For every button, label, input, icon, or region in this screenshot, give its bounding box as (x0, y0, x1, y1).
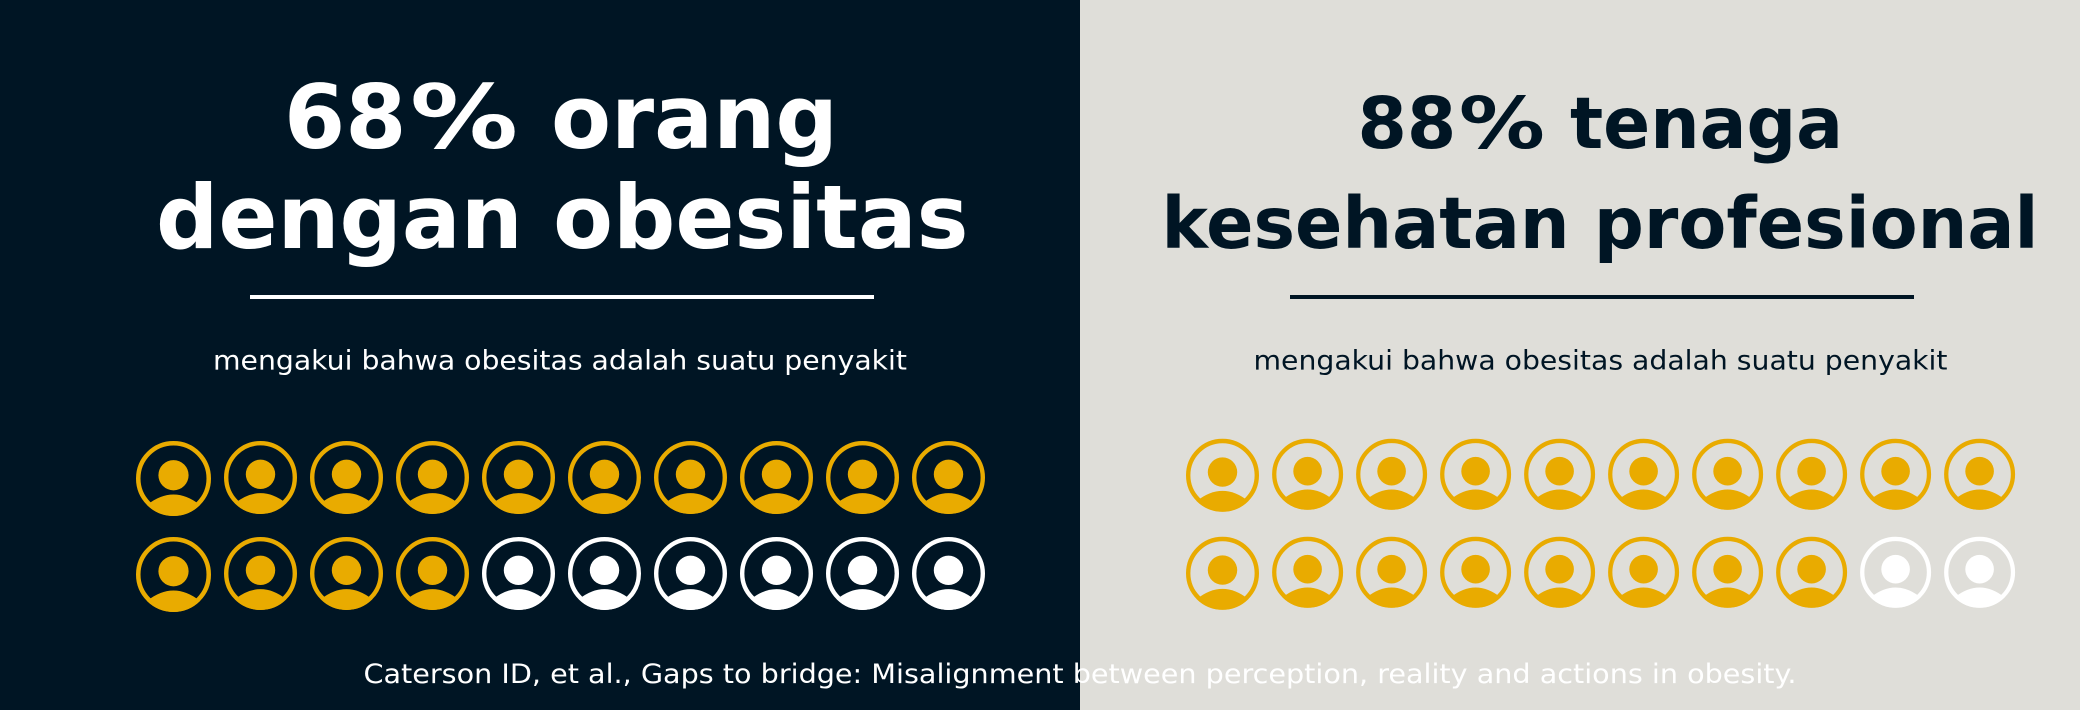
heading: 88% of health professionals: kesehatan profesional (1162, 182, 2038, 265)
left panel background (0, 0, 1080, 710)
icon: person gold (1946, 441, 2013, 510)
icon: person gold (1358, 539, 1425, 608)
icon: person gold (1526, 539, 1593, 608)
heading: 88% of health professionals (1162, 82, 2038, 265)
pictogram: 18 of 20 gold (1188, 441, 2013, 610)
icon: person gold (226, 443, 295, 514)
icon: person gold (398, 539, 467, 610)
right panel background (1080, 0, 2080, 710)
icon: person gold (828, 443, 897, 514)
heading underline (250, 295, 874, 299)
icon: person gold (656, 443, 725, 514)
icon: person white (1946, 539, 2013, 608)
icon: person white (656, 539, 725, 610)
icon: person gold (914, 443, 983, 514)
heading: 68% of people with obesity: orang (551, 66, 838, 169)
icon: person gold (1274, 441, 1341, 510)
heading underline (1290, 295, 1914, 299)
icon: person gold (1694, 441, 1761, 510)
heading: 68% of people with obesity (156, 66, 968, 269)
icon: person gold (1778, 539, 1845, 608)
subheading: mengakui bahwa obesitas adalah suatu penyakit (1254, 346, 1948, 376)
icon: person gold (484, 443, 553, 514)
icon: person gold (312, 539, 381, 610)
icon: person gold (742, 443, 811, 514)
subheading: mengakui bahwa obesitas adalah suatu penyakit (213, 346, 907, 376)
icon: person gold (1442, 539, 1509, 608)
icon: person white (828, 539, 897, 610)
icon: person gold (138, 539, 209, 612)
heading: 88% of health professionals: 88 (1358, 82, 1456, 165)
icon: person white (914, 539, 983, 610)
icon: person gold (398, 443, 467, 514)
icon: person gold (1526, 441, 1593, 510)
icon: person gold (570, 443, 639, 514)
icon: person gold (138, 443, 209, 516)
icon: person gold (1188, 441, 1257, 512)
icon: person gold (1862, 441, 1929, 510)
icon: person gold (1694, 539, 1761, 608)
heading: 68% of people with obesity: % (410, 66, 518, 169)
icon: person gold (1442, 441, 1509, 510)
icon: person gold (1778, 441, 1845, 510)
heading: 68% of people with obesity: 68 (284, 66, 406, 169)
icon: person gold (226, 539, 295, 610)
icon: person gold (1358, 441, 1425, 510)
icon: person white (742, 539, 811, 610)
icon: person white (484, 539, 553, 610)
pictogram: 14 of 20 gold (138, 443, 983, 612)
footer citation: Caterson ID, et al., Gaps to bridge: Misalignment between perception, reality and actions in obesity. (364, 659, 1796, 690)
icon: person white (570, 539, 639, 610)
icon: person gold (1610, 539, 1677, 608)
panel: people with obesity (0, 0, 1080, 710)
icon: person gold (1188, 539, 1257, 610)
heading: 68% of people with obesity: dengan obesitas (156, 166, 968, 269)
icon: person gold (1274, 539, 1341, 608)
heading: 88% of health professionals: tenaga (1570, 82, 1843, 165)
icon: person gold (312, 443, 381, 514)
panel: health professionals (1080, 0, 2080, 710)
heading: 88% of health professionals: % (1459, 82, 1545, 165)
icon: person white (1862, 539, 1929, 608)
icon: person gold (1610, 441, 1677, 510)
